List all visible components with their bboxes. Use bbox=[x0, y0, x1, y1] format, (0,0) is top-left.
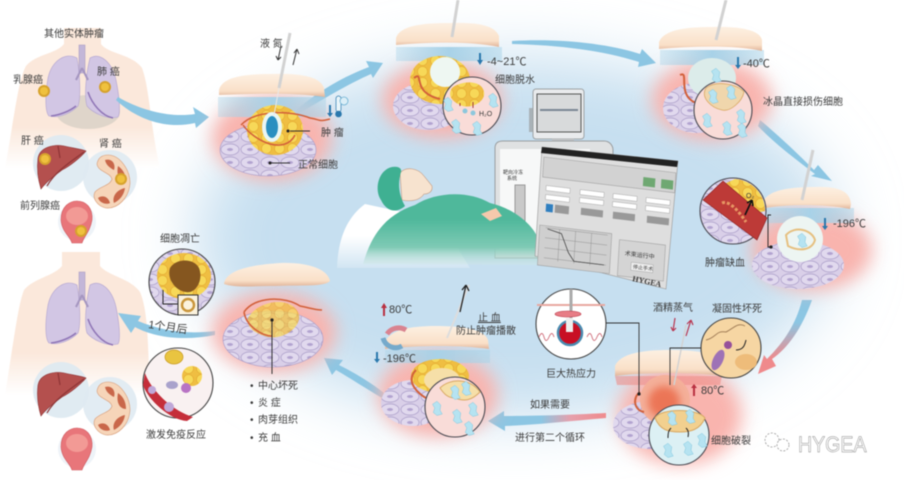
labels: second cycle: 如果需要 bbox=[530, 398, 570, 411]
labels: second cycle: 进行第二个循环 bbox=[515, 431, 585, 444]
labels: cancer types: 乳腺癌 bbox=[13, 73, 43, 86]
labels: stage 5: 细胞破裂 bbox=[711, 434, 751, 447]
list: tissue outcomes: 中心坏死 bbox=[258, 379, 298, 392]
labels: stage 6: 80℃ bbox=[389, 304, 412, 316]
control panel screen: 停止手术 bbox=[633, 263, 653, 273]
cart body bbox=[495, 141, 613, 258]
callout: apoptosis: 细胞凋亡 bbox=[160, 232, 200, 245]
panel: patient body after treatment bbox=[5, 252, 150, 470]
patient bbox=[337, 167, 540, 268]
labels: stage 4: O₂ bbox=[746, 193, 754, 200]
callout: coagulative necrosis bbox=[670, 318, 761, 385]
cart body: 系统 bbox=[507, 175, 517, 182]
stage 3: ice crystals bbox=[652, 0, 772, 140]
labels: stage 5: 酒精蒸气 bbox=[653, 301, 693, 314]
labels: cancer types: 肝 癌 bbox=[21, 134, 44, 147]
stage 7: after ablation bbox=[212, 263, 336, 374]
callout: immune response bbox=[143, 348, 213, 441]
labels: cancer types bbox=[13, 27, 122, 212]
labels: stage 4: -196℃ bbox=[833, 218, 866, 230]
panel: patient body before treatment bbox=[5, 28, 160, 243]
labels: cancer types: 前列腺癌 bbox=[20, 199, 60, 212]
labels: stage 5: 80℃ bbox=[701, 385, 724, 397]
labels: stage 6: 止 血 bbox=[478, 311, 501, 324]
labels: stage 3: -40℃ bbox=[743, 58, 770, 70]
callout: apoptosis bbox=[149, 232, 215, 315]
labels: stage 2: -4~21℃ bbox=[487, 56, 526, 68]
list: tissue outcomes: • bbox=[250, 398, 254, 409]
stage 1: freezing start bbox=[212, 33, 348, 180]
callout: thermal stress bbox=[536, 289, 641, 396]
callout: immune response: 激发免疫反应 bbox=[146, 428, 206, 441]
stage 2: cell dehydration bbox=[382, 0, 502, 138]
list: tissue outcomes bbox=[250, 379, 298, 444]
arrows: cycle bbox=[116, 40, 832, 431]
labels: stage 6: 防止肿瘤播散 bbox=[456, 324, 516, 337]
labels: stage 6 bbox=[383, 304, 516, 365]
control panel screen: 术束运行中 bbox=[624, 249, 655, 261]
labels: stage 2: 细胞脱水 bbox=[495, 73, 535, 86]
labels: stage 6: -196℃ bbox=[383, 353, 416, 365]
labels: cancer types: 其他实体肿瘤 bbox=[44, 27, 104, 40]
stage 6: second cycle bbox=[374, 285, 498, 437]
labels: second cycle bbox=[515, 398, 585, 444]
labels: stage 5: 凝固性坏死 bbox=[712, 302, 762, 315]
labels: stage 1: 正常细胞 bbox=[298, 158, 338, 171]
cart body: 靶向冷冻 bbox=[503, 169, 523, 176]
labels: stage 5 bbox=[653, 301, 762, 447]
labels: stage 1 bbox=[260, 37, 344, 171]
stage 5: heating and cell rupture bbox=[613, 318, 742, 465]
list: tissue outcomes: • bbox=[250, 433, 254, 444]
list: tissue outcomes: • bbox=[250, 415, 254, 426]
list: tissue outcomes: 肉芽组织 bbox=[258, 413, 298, 426]
labels: cancer types: 肾 癌 bbox=[99, 137, 122, 150]
icon: freeze-thaw cycle bbox=[383, 328, 406, 348]
labels: cancer types: 肺 癌 bbox=[97, 65, 120, 78]
labels: stage 1: 液 氮 bbox=[260, 37, 283, 50]
labels: stage 3: 冰晶直接损伤细胞 bbox=[763, 95, 843, 108]
list: tissue outcomes: • bbox=[250, 381, 254, 392]
labels: stage 2 bbox=[479, 56, 535, 118]
watermark: HYGEA bbox=[765, 433, 867, 457]
control panel screen: HYGEA bbox=[632, 274, 662, 289]
labels: stage 1: 肿 瘤 bbox=[321, 126, 344, 139]
machine: treatment console bbox=[495, 89, 613, 258]
labels: stage 3 bbox=[743, 58, 843, 108]
background glow bbox=[195, 58, 835, 418]
labels: stage 4 bbox=[705, 193, 866, 269]
control panel screen bbox=[535, 147, 678, 289]
callout: thermal stress: 巨大热应力 bbox=[546, 367, 596, 380]
watermark: HYGEA: HYGEA bbox=[798, 433, 867, 457]
list: tissue outcomes: 充 血 bbox=[258, 431, 281, 444]
labels: stage 4: 肿瘤缺血 bbox=[705, 256, 745, 269]
stage 4: tumor ischemia bbox=[700, 150, 872, 290]
list: tissue outcomes: 炎 症 bbox=[258, 396, 281, 409]
monitor bbox=[529, 89, 584, 145]
labels: stage 2: H₂O bbox=[479, 111, 493, 118]
label: one month later: 1个月后 bbox=[148, 318, 188, 336]
